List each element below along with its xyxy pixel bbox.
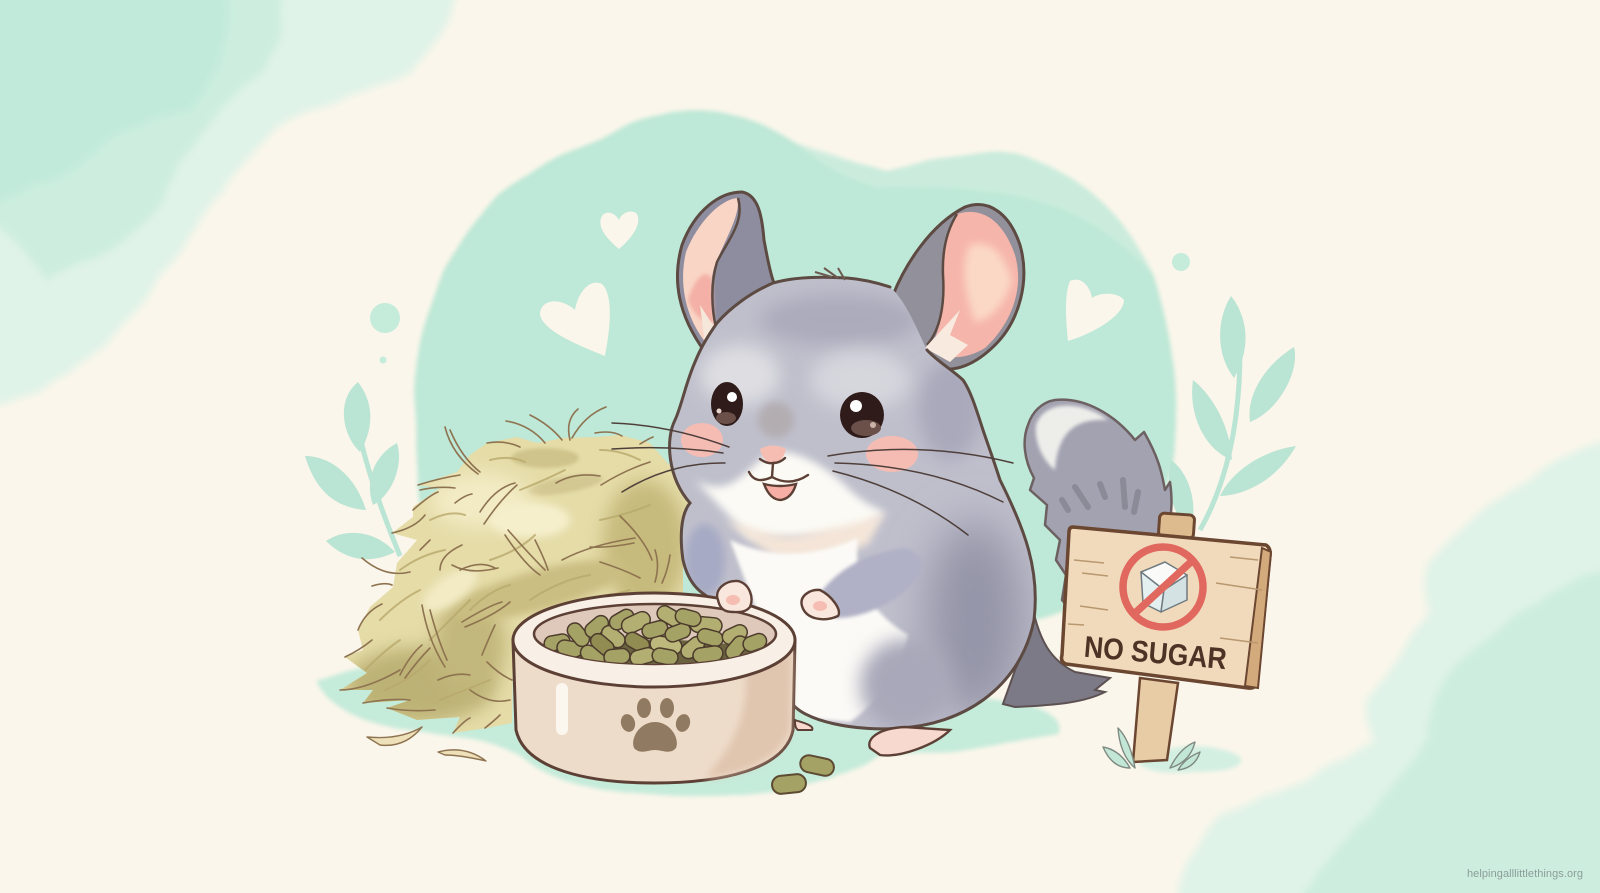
- icon: paw print: [619, 698, 692, 752]
- white belly: [730, 538, 908, 722]
- wood grain: [1068, 557, 1262, 643]
- hind foot: [869, 727, 950, 755]
- eye: right: [840, 392, 884, 438]
- decorative dots: [370, 253, 1190, 364]
- sign text: NO SUGAR: [1083, 631, 1228, 676]
- nose: [760, 446, 786, 465]
- grass: [1103, 728, 1200, 770]
- hay shading: [345, 448, 687, 723]
- hay bale: [340, 407, 693, 761]
- bowl side shading: [705, 650, 792, 778]
- loose hay pieces: [367, 727, 486, 761]
- mouth: [749, 458, 808, 500]
- head tuft: [815, 268, 845, 280]
- pellets: [543, 605, 768, 664]
- watercolor wash: top left: [0, 0, 462, 412]
- front paw: right: [801, 590, 839, 619]
- watermark: helpingalllittlethings.org: [1467, 868, 1583, 880]
- hearts and dots: [540, 212, 1124, 356]
- tail: [1003, 400, 1172, 707]
- cheek: right: [866, 436, 918, 472]
- tail highlight: [1036, 406, 1108, 470]
- central mint blob: [416, 110, 1176, 660]
- front paw: left: [717, 581, 752, 612]
- right arm: [821, 549, 915, 620]
- cheek: left: [681, 423, 723, 457]
- eye: left: [711, 382, 743, 426]
- icon: sugar cube: [1141, 562, 1187, 612]
- sign board: [1062, 527, 1270, 688]
- watercolor wash: bottom right: [1173, 434, 1600, 893]
- right ear: [893, 205, 1024, 369]
- left ear: [677, 192, 775, 352]
- icon: small heart: [600, 212, 638, 249]
- food bowl: [513, 593, 795, 783]
- bowl interior: [534, 604, 776, 664]
- white muzzle: [695, 452, 885, 538]
- no sugar sign: [1062, 513, 1271, 770]
- whiskers: [612, 423, 1013, 535]
- belly shadow: [860, 639, 950, 731]
- sign post: [1133, 678, 1178, 762]
- icon: right heart: [1066, 280, 1124, 341]
- cream chest band: [728, 514, 885, 555]
- icon: large heart: [540, 283, 610, 356]
- icon: prohibition circle: [1123, 547, 1203, 627]
- hay strands: [340, 407, 670, 733]
- upper tail: [1025, 400, 1172, 620]
- ground shadow: [316, 640, 1242, 796]
- fur shading: [685, 294, 1025, 731]
- bowl highlight: [556, 683, 568, 735]
- right leaf sprig: [1169, 296, 1296, 530]
- spilled pellets: [771, 754, 835, 795]
- chinchilla body and head: [612, 268, 1035, 731]
- hay fibres: [365, 450, 650, 700]
- lower tail: [1003, 610, 1110, 707]
- tail fur marks: [1062, 480, 1138, 512]
- left leaf sprig: [305, 382, 400, 559]
